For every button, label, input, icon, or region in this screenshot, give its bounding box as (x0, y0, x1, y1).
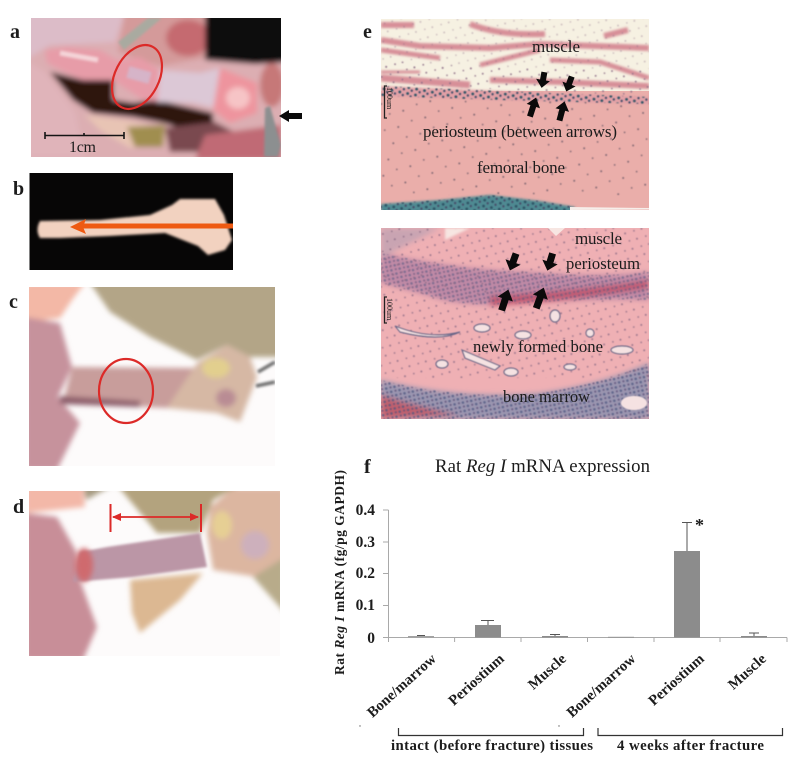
scale bar: 1cm: 1cm (69, 139, 97, 156)
text: periosteum: periosteum (566, 254, 640, 273)
label: f: f (364, 456, 371, 478)
panel e top: intact femur histology (381, 19, 649, 212)
x-axis category labels: Bone/marrow (364, 651, 440, 721)
text: bone marrow: bone marrow (503, 387, 590, 406)
scale bar: 1cm (44, 132, 125, 152)
x-axis category labels: Periostium (646, 651, 708, 709)
y-axis tick labels (356, 502, 375, 647)
x-axis category labels: Bone/marrow (564, 651, 639, 721)
x-axis category labels (364, 651, 770, 721)
y-axis title: Rat Reg I mRNA (fg/pg GAPDH) (332, 470, 347, 675)
arrow: orange direction arrow (70, 219, 233, 234)
arrows: periosteum markers (523, 71, 578, 122)
panel d: femur with stripped periosteum photo (25, 485, 285, 660)
label: b: b (13, 178, 24, 200)
bracket: 4 weeks after fracture (598, 728, 782, 754)
panel b: excised femur photo (30, 173, 233, 270)
label: c: c (9, 291, 18, 313)
bar chart: Reg I mRNA expression (332, 470, 787, 754)
text: femoral bone: femoral bone (477, 158, 565, 177)
scale bar: 100um: 100um (385, 298, 394, 321)
panel e bottom: post-fracture histology (381, 228, 649, 419)
bracket: intact tissues (391, 728, 593, 754)
label: a: a (10, 21, 20, 43)
x-axis category labels: Muscle (725, 651, 770, 693)
error bars (417, 522, 759, 636)
axes (383, 510, 787, 642)
y-axis tick labels: 0.3 (356, 534, 375, 551)
femur bone (38, 199, 232, 255)
y-axis tick labels: 0.4 (356, 502, 375, 519)
text: periosteum (between arrows): periosteum (between arrows) (423, 122, 617, 141)
scale bar: 100um: 100um (385, 87, 394, 110)
icon: black arrow at panel a edge (279, 110, 302, 122)
panel a: exposed rat femur photo (25, 12, 302, 162)
annotation: red measuring bracket (110, 504, 201, 532)
stripped femoral shaft (73, 533, 207, 582)
annotation: red ellipse on femur (110, 44, 164, 110)
label: e: e (363, 21, 372, 43)
bracket: intact tissues: intact (before fracture) tissues (391, 738, 593, 754)
arrows: periosteum markers (494, 251, 560, 313)
scale bar: 100um (384, 86, 394, 118)
y-axis tick labels: 0.1 (356, 597, 375, 614)
text: newly formed bone: newly formed bone (473, 337, 603, 356)
annotation: red ellipse on femur (99, 359, 153, 423)
x-axis category labels: Periostium (446, 651, 508, 709)
bracket: 4 weeks after fracture: 4 weeks after fracture (617, 738, 764, 754)
y-axis tick labels: 0.2 (356, 565, 375, 582)
x-axis category labels: Muscle (525, 651, 570, 693)
text: muscle: muscle (532, 37, 580, 56)
text: muscle: muscle (575, 229, 622, 248)
significance asterisk: * (695, 515, 704, 535)
bars (408, 551, 767, 638)
label: d: d (13, 496, 24, 518)
y-axis tick labels: 0 (367, 630, 375, 647)
chart title: Rat Reg I mRNA expression (435, 456, 651, 477)
panel c: femur with callus photo (29, 287, 275, 466)
